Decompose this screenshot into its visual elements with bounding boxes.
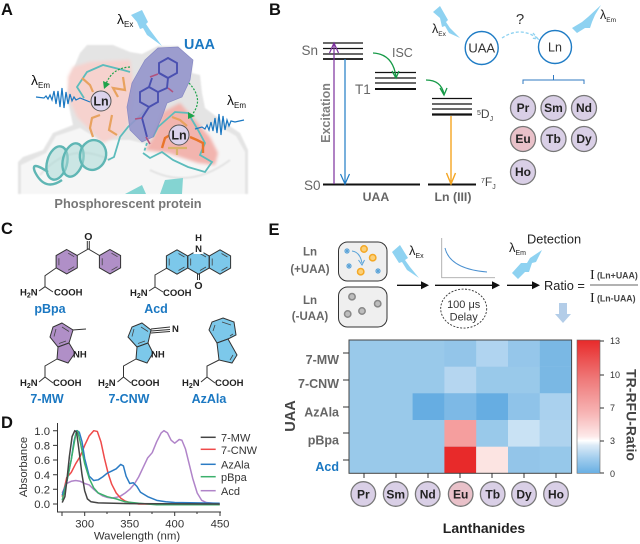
molecule AzAla: AzAla <box>192 392 227 406</box>
molecule Acd: N <box>195 244 202 255</box>
dashed arrow <box>502 32 538 39</box>
7FJ label: F <box>485 175 492 189</box>
molecule AzAla: N <box>193 378 200 389</box>
molecule 7-CNW: COOH <box>131 378 160 389</box>
delay circle <box>441 289 487 328</box>
molecule 7-CNW: N <box>172 324 179 335</box>
panel: amino acid structures <box>20 231 244 406</box>
colour bar <box>577 336 620 479</box>
7FJ label: 7 <box>481 178 485 185</box>
5DJ label: 5 <box>477 110 481 117</box>
molecule 7-CNW: NH <box>151 350 165 360</box>
legend: Acd <box>221 486 240 498</box>
y tick labels: 0.2 <box>34 484 50 496</box>
molecule Acd: COOH <box>163 288 192 299</box>
ratio formula: I <box>590 291 595 306</box>
lambda Ex label: Ex <box>438 31 447 38</box>
lanthanide grid <box>510 96 596 184</box>
7FJ label: J <box>492 184 496 191</box>
molecule pBpa: N <box>31 288 38 298</box>
column lanthanide circles <box>351 482 568 506</box>
label lambda Ex: Ex <box>124 20 133 29</box>
delay circle: 100 μs <box>447 299 481 311</box>
UAA axis label: UAA <box>363 190 389 204</box>
molecule pBpa <box>20 231 121 316</box>
molecule pBpa: O <box>84 231 92 243</box>
lambda Em label: Em <box>516 250 526 257</box>
panel: protein structure A <box>18 10 248 211</box>
detection label: Detection <box>527 232 581 246</box>
lanthanide grid: Eu <box>515 132 531 146</box>
pink binding site left <box>68 60 134 143</box>
heatmap cells <box>349 340 572 473</box>
lanthanide grid: Nd <box>576 101 592 115</box>
bracket <box>523 75 584 84</box>
Ln ion left: Ln <box>93 94 109 108</box>
panel label D: D <box>1 414 13 432</box>
lambda Em label: λ <box>509 240 516 255</box>
icon: emission bolt <box>512 250 542 279</box>
y tick labels: 0.4 <box>34 470 50 482</box>
molecule Acd: O <box>194 280 203 292</box>
colour bar: 0 <box>610 469 615 479</box>
panel: absorbance chart <box>18 423 258 542</box>
well with UAA <box>338 242 387 281</box>
ratio formula: Ratio = <box>544 278 585 293</box>
ratio formula: I <box>590 268 595 283</box>
row labels: AzAla <box>304 406 340 420</box>
molecule 7-CNW: N <box>109 378 116 389</box>
column lanthanide circles: Pr <box>357 488 370 502</box>
lambda Ex label: λ <box>409 243 416 258</box>
ISC arrow <box>373 53 399 78</box>
y tick labels: 0.0 <box>34 499 50 511</box>
panel: heatmap <box>283 336 640 536</box>
loop ribbons <box>77 65 212 172</box>
5DJ label: J <box>490 116 493 123</box>
Ln ion right: Ln <box>171 128 187 142</box>
legend <box>201 432 258 498</box>
y axis title: Absorbance <box>18 437 30 497</box>
column lanthanide circles: Eu <box>453 488 468 502</box>
helix ribbon <box>34 137 109 184</box>
down arrow <box>555 303 571 323</box>
icon: excitation bolt <box>392 245 419 278</box>
molecule 7-MW: N <box>31 378 38 389</box>
molecule 7-MW: COOH <box>53 378 82 389</box>
y tick labels: 1.0 <box>34 426 50 438</box>
colour bar: 13 <box>610 336 620 346</box>
legend: AzAla <box>221 459 251 471</box>
molecule 7-MW: 7-MW <box>30 392 64 406</box>
spectra curves <box>62 431 220 505</box>
molecule pBpa: 2 <box>27 292 31 300</box>
green energy transfer arrows <box>106 67 198 116</box>
y tick labels: 0.6 <box>34 455 50 467</box>
label UAA: UAA <box>184 37 215 53</box>
excitation label: Excitation <box>319 83 333 143</box>
level labels: T1 <box>355 82 371 97</box>
excitation arrow <box>330 43 338 184</box>
process arrows <box>397 281 540 289</box>
label lambda Em left: Em <box>38 81 50 90</box>
colour bar: 3 <box>610 436 615 446</box>
UAA circle: UAA <box>468 40 495 56</box>
x tick labels: 350 <box>120 518 139 530</box>
panel label E: E <box>268 221 280 239</box>
Ln ion left <box>91 91 111 111</box>
level labels <box>302 43 413 193</box>
panel: workflow <box>290 232 638 328</box>
emission wave left <box>36 88 90 108</box>
relaxation arrow <box>340 59 350 184</box>
orange side chains <box>82 77 187 155</box>
y axis title: UAA <box>283 400 299 432</box>
molecule Acd: N <box>141 288 148 299</box>
lanthanide grid: Sm <box>544 101 563 115</box>
lanthanide grid: Ho <box>515 165 531 179</box>
label Ln plus UAA: Ln <box>303 246 317 258</box>
5DJ label: D <box>481 107 490 121</box>
x axis title: Lanthanides <box>443 520 525 536</box>
lanthanide grid: Pr <box>517 101 530 115</box>
Sn levels <box>323 43 363 54</box>
molecule AzAla: 2 <box>189 383 193 390</box>
T1 levels <box>375 72 416 83</box>
x tick labels: 400 <box>165 518 184 530</box>
transfer arrow <box>426 80 447 95</box>
legend: 7-MW <box>221 432 251 444</box>
caption: Phosphorescent protein <box>54 196 202 211</box>
S0 and ground levels <box>323 184 476 186</box>
label lambda Em left: λ <box>31 72 38 88</box>
column lanthanide circles: Sm <box>386 488 405 502</box>
bottom ribbons <box>125 178 183 194</box>
molecule 7-CNW <box>98 323 179 406</box>
molecule 7-MW <box>20 323 87 406</box>
molecule 7-MW: NH <box>73 350 87 360</box>
UAA circle <box>465 32 498 64</box>
lanthanide grid: Tb <box>546 132 561 146</box>
molecule 7-MW: 2 <box>27 383 31 390</box>
level labels: Sn <box>302 43 318 58</box>
UAA purple surface <box>127 47 193 142</box>
colour bar: 7 <box>610 403 615 413</box>
ratio formula: (Ln+UAA) <box>597 270 638 280</box>
row labels <box>298 353 340 474</box>
ratio formula <box>544 268 638 306</box>
lambda Ex label: Ex <box>416 253 424 260</box>
x axis title: Wavelength (nm) <box>94 530 180 542</box>
column lanthanide circles: Ho <box>548 488 564 502</box>
label lambda Em right: λ <box>227 92 234 108</box>
x tick labels: 450 <box>211 518 229 530</box>
molecule 7-CNW: 7-CNW <box>109 392 150 406</box>
colour bar title: TR-RFU-Ratio <box>624 369 640 461</box>
column lanthanide circles: Nd <box>420 488 436 502</box>
molecule AzAla: COOH <box>215 378 244 389</box>
column lanthanide circles: Tb <box>485 488 500 502</box>
Ln III axis label: Ln (III) <box>435 190 471 204</box>
lambda Em label: λ <box>600 8 606 22</box>
Ln circle <box>538 30 572 64</box>
emission arrow <box>446 116 456 184</box>
legend: pBpa <box>221 472 248 484</box>
lambda Ex label: λ <box>432 22 438 36</box>
label lambda Em right: Em <box>234 101 246 110</box>
y tick labels: 0.8 <box>34 440 50 452</box>
molecule pBpa: COOH <box>54 288 83 298</box>
icon: emission bolt <box>572 5 601 33</box>
molecule Acd <box>130 233 231 316</box>
axes <box>53 423 221 516</box>
emission wave right <box>195 114 244 135</box>
panel label B: B <box>269 1 281 19</box>
molecule AzAla <box>182 318 244 406</box>
molecule Acd: Acd <box>144 302 168 316</box>
well without UAA <box>338 287 387 327</box>
panel label C: C <box>1 220 13 238</box>
row labels: 7-MW <box>306 353 339 367</box>
pale sulfur and carbonyl sticks <box>135 74 173 144</box>
pink binding site right <box>145 103 218 165</box>
column lanthanide circles: Dy <box>516 488 532 502</box>
legend: 7-CNW <box>221 445 258 457</box>
question mark: ? <box>516 11 524 28</box>
UAA molecule sticks <box>140 58 177 137</box>
label lambda Ex: λ <box>117 11 124 27</box>
molecule AzAla: H <box>182 378 189 389</box>
row labels: Acd <box>315 460 339 474</box>
decay plot <box>442 238 495 278</box>
level labels: S0 <box>304 178 321 193</box>
row labels: 7-CNW <box>298 377 339 391</box>
level labels: ISC <box>392 46 413 60</box>
label Ln minus UAA: Ln <box>303 295 317 307</box>
molecule Acd: H <box>130 288 137 299</box>
panel: energy diagram <box>302 5 616 204</box>
molecule Acd: H <box>195 233 202 244</box>
lanthanide grid: Dy <box>576 132 592 146</box>
colour bar: 10 <box>610 370 620 380</box>
Ln circle: Ln <box>548 40 562 54</box>
5DJ levels <box>432 98 472 109</box>
molecule 7-MW: H <box>20 378 27 389</box>
icon: excitation bolt <box>433 6 460 38</box>
Ln ion right <box>169 125 189 145</box>
label plus UAA: (+UAA) <box>290 264 330 276</box>
protein surface <box>18 45 248 194</box>
icon: lightning bolt <box>131 10 162 46</box>
heatmap ticks <box>343 353 556 478</box>
x tick labels <box>75 518 229 530</box>
molecule pBpa: pBpa <box>34 302 67 316</box>
y tick labels <box>34 426 50 511</box>
ratio formula: (Ln-UAA) <box>597 294 636 304</box>
label minus UAA: (-UAA) <box>292 311 328 323</box>
lambda Em label: Em <box>606 17 616 24</box>
delay circle: Delay <box>450 312 478 324</box>
row labels: pBpa <box>308 434 340 448</box>
x tick labels: 300 <box>75 518 94 530</box>
molecule Acd: 2 <box>137 293 141 300</box>
molecule 7-CNW: 2 <box>105 383 109 390</box>
panel label A: A <box>1 1 13 19</box>
molecule pBpa: H <box>20 288 27 298</box>
molecule 7-CNW: H <box>98 378 105 389</box>
